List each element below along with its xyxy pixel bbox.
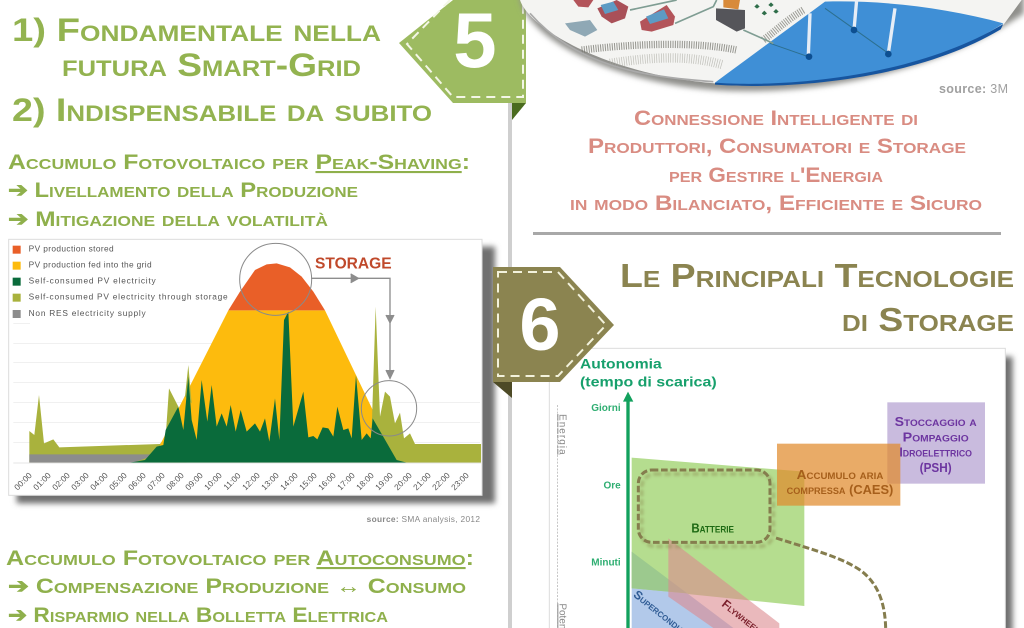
section 5 heading: futura Smart-Grid bbox=[62, 47, 361, 83]
area: PSH bbox=[887, 402, 985, 484]
area: flywheel bbox=[668, 538, 779, 628]
text block: autoconsumo bbox=[6, 547, 474, 627]
text block: autoconsumo: Accumulo Fotovoltaico per Autoconsumo : bbox=[6, 547, 474, 570]
text block: smart grid definition: Produttori, Consumatori e Storage bbox=[588, 135, 966, 158]
chart time axis: 17:00 bbox=[335, 470, 357, 492]
area: PV production fed into the grid bbox=[160, 310, 397, 463]
section 5 heading bbox=[12, 12, 432, 128]
label: PSH: Pompaggio bbox=[903, 430, 969, 444]
chart time axis: 12:00 bbox=[240, 470, 262, 492]
chart source: source: SMA analysis, 2012 bbox=[367, 514, 480, 524]
energy axis: Energia bbox=[556, 414, 567, 455]
badge 5 bbox=[399, 0, 526, 120]
section 6 heading: di Storage bbox=[842, 301, 1014, 338]
chart time axis: 23:00 bbox=[449, 470, 471, 492]
chart legend: Non RES electricity supply bbox=[29, 308, 146, 318]
area: self-consumed through storage, morning spike bbox=[185, 365, 192, 403]
chart legend: Self-consumed PV electricity through storage bbox=[29, 292, 228, 302]
chart time axis: 08:00 bbox=[164, 470, 186, 492]
image source: source: 3M bbox=[939, 82, 1008, 96]
chart time axis: 19:00 bbox=[373, 470, 395, 492]
chart time axis: 16:00 bbox=[316, 470, 338, 492]
area: superconduttori bbox=[632, 552, 733, 628]
section 5 heading: 2) Indispensabile da subito bbox=[12, 92, 432, 128]
label: batterie: Batterie bbox=[691, 522, 734, 536]
chart legend bbox=[13, 244, 228, 318]
chart legend: PV production stored bbox=[29, 244, 114, 254]
area: CAES bbox=[777, 444, 900, 506]
text block: smart grid definition: in modo Bilanciato, Efficiente e Sicuro bbox=[570, 192, 982, 215]
chart time axis: 00:00 bbox=[12, 470, 34, 492]
section 6 heading bbox=[620, 257, 1014, 338]
chart time axis: 03:00 bbox=[69, 470, 91, 492]
area: batterie bbox=[632, 458, 804, 606]
text block: peak shaving: Accumulo Fotovoltaico per Peak-Shaving : bbox=[8, 151, 470, 174]
illustration: smart grid disc bbox=[520, 0, 1024, 91]
storage circles bbox=[240, 243, 417, 436]
chart time axis: 13:00 bbox=[259, 470, 281, 492]
panel: storage technologies chart bbox=[549, 348, 1013, 628]
section 6 heading: Le Principali Tecnologie bbox=[620, 257, 1014, 294]
label: CAES bbox=[787, 468, 893, 497]
section 5 heading: 1) Fondamentale nella bbox=[12, 12, 381, 48]
batteries highlight bbox=[638, 470, 886, 628]
area: self-consumed PV electricity bbox=[130, 312, 407, 463]
label: storage: STORAGE bbox=[315, 255, 392, 272]
duration axis: (tempo di scarica) bbox=[580, 374, 717, 390]
text block: smart grid definition bbox=[570, 107, 982, 215]
chart time axis bbox=[12, 463, 481, 492]
area: non RES supply bbox=[29, 454, 157, 463]
storage arrow bbox=[311, 274, 394, 378]
area: self-consumed through storage, base bbox=[29, 388, 187, 463]
duration axis bbox=[580, 355, 717, 628]
chart time axis: 07:00 bbox=[145, 470, 167, 492]
duration axis: Ore bbox=[603, 481, 621, 492]
label: PSH: (PSH) bbox=[920, 461, 952, 475]
text block: peak shaving bbox=[8, 151, 470, 231]
chart time axis: 09:00 bbox=[183, 470, 205, 492]
area: PV production stored bbox=[228, 263, 325, 310]
panel: PV storage chart bbox=[9, 239, 495, 524]
chart time axis: 04:00 bbox=[88, 470, 110, 492]
label: PSH bbox=[895, 415, 977, 475]
chart time axis: 10:00 bbox=[202, 470, 224, 492]
text block: smart grid definition: Connessione Intelligente di bbox=[634, 107, 918, 130]
energy axis bbox=[556, 405, 567, 628]
chart legend: PV production fed into the grid bbox=[29, 260, 152, 270]
houses and buildings bbox=[565, 0, 779, 43]
text block: autoconsumo: ➔ Risparmio nella Bolletta Elettrica bbox=[8, 604, 388, 627]
vertical divider bbox=[508, 100, 512, 628]
duration axis: Autonomia bbox=[580, 355, 662, 371]
chart time axis: 20:00 bbox=[392, 470, 414, 492]
chart time axis: 18:00 bbox=[354, 470, 376, 492]
duration axis: Minuti bbox=[591, 558, 621, 569]
duration axis: Giorni bbox=[591, 403, 621, 414]
text block: autoconsumo: ➔ Compensazione Produzione ↔ Consumo bbox=[8, 575, 466, 598]
area: self-consumed through storage, evening bbox=[372, 307, 481, 463]
badge 6 bbox=[493, 267, 614, 398]
chart time axis: 06:00 bbox=[126, 470, 148, 492]
chart legend: Self-consumed PV electricity bbox=[29, 276, 156, 286]
label: CAES: compressa (CAES) bbox=[787, 483, 893, 497]
label: CAES: Accumulo aria bbox=[797, 468, 884, 482]
text block: peak shaving: ➔ Mitigazione della volatilità bbox=[8, 208, 328, 231]
badge 6: 6 bbox=[519, 283, 561, 366]
text block: smart grid definition: per Gestire l'Energia bbox=[669, 164, 883, 187]
chart time axis: 14:00 bbox=[278, 470, 300, 492]
chart time axis: 21:00 bbox=[411, 470, 433, 492]
sea with wind turbines bbox=[715, 0, 1003, 86]
text block: peak shaving: ➔ Livellamento della Produzione bbox=[8, 179, 358, 202]
label: PSH: Idroelettrico bbox=[899, 446, 972, 460]
chart time axis: 22:00 bbox=[430, 470, 452, 492]
chart time axis: 02:00 bbox=[50, 470, 72, 492]
chart time axis: 15:00 bbox=[297, 470, 319, 492]
chart time axis: 11:00 bbox=[221, 470, 243, 492]
label: PSH: Stoccaggio a bbox=[895, 415, 977, 429]
chart time axis: 05:00 bbox=[107, 470, 129, 492]
chart time axis: 01:00 bbox=[31, 470, 53, 492]
